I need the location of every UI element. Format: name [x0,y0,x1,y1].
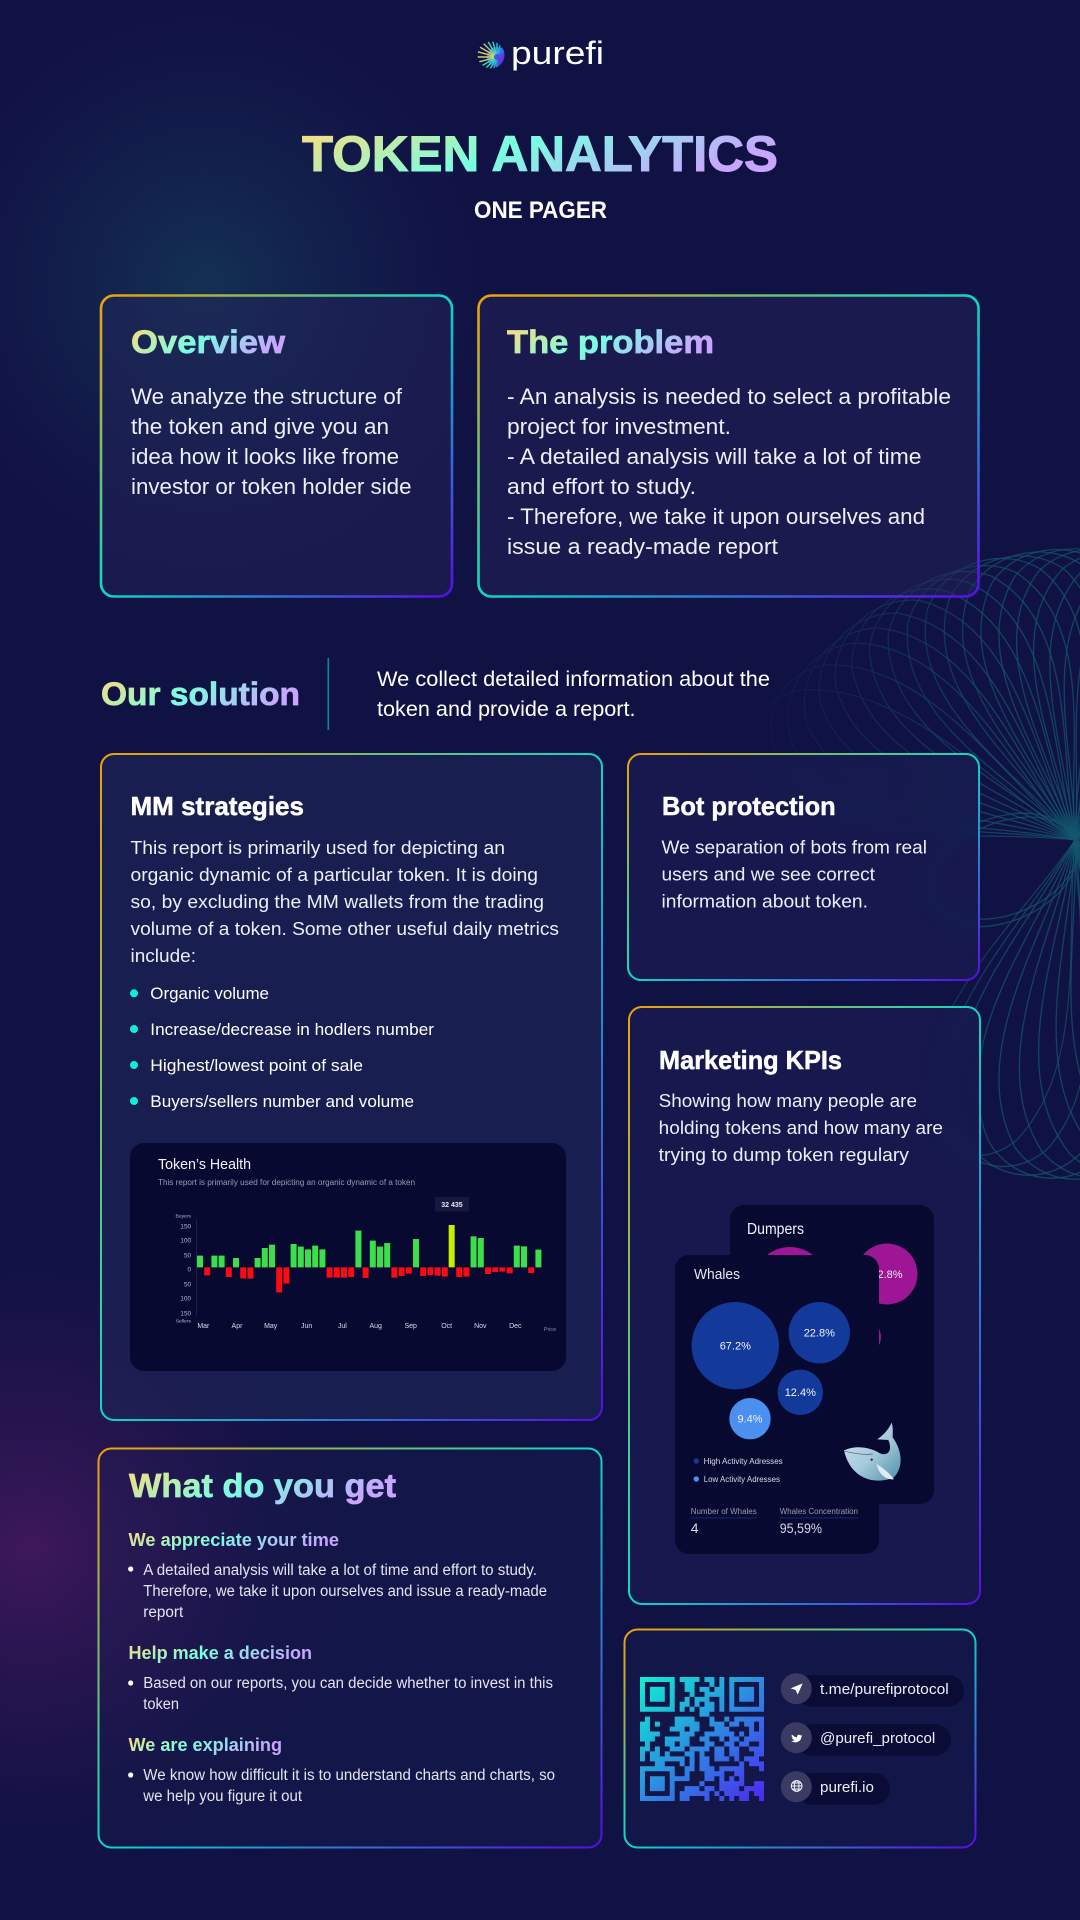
month labels: Jul [338,1323,347,1330]
section: we appreciate your time [128,1530,547,1621]
month labels: Nov [474,1323,487,1330]
subtitle: ONE PAGER [474,197,607,224]
overview body: the token and give you an [131,414,389,439]
icon: globe [791,1781,802,1791]
legend [694,1457,783,1484]
what do you get heading: What do you get [129,1467,396,1504]
problem body: - Therefore, we take it upon ourselves and [507,504,925,529]
month labels: Dec [509,1323,522,1330]
icon: twitter [791,1735,802,1742]
stat: number of whales [691,1507,757,1536]
legend: High Activity Adresses [704,1457,783,1466]
section: we are explaining: we help you figure it out [142,1788,303,1805]
y axis labels: 0 [187,1267,191,1274]
card: whales [675,1255,901,1554]
panel: marketing KPIs [628,1006,981,1605]
month labels [197,1323,556,1333]
problem body: issue a ready-made report [507,534,778,559]
panel: what do you get [98,1448,602,1848]
highlighted bar [449,1225,455,1267]
stat: whales concentration: Whales Concentration [780,1507,858,1516]
bubble 9.4% [729,1398,771,1439]
section: help make a decision: Based on our reports, you can decide whether to invest in this [143,1675,553,1692]
month labels: Mar [197,1323,210,1330]
sellers bars [204,1267,534,1292]
link: twitter: @purefi_protocol [820,1730,935,1747]
stat: number of whales: Number of Whales [691,1507,757,1516]
problem body [507,384,951,559]
MM bullet list: Buyers/sellers number and volume [150,1093,414,1111]
y axis labels: 100 [180,1296,191,1303]
y axis labels: 50 [184,1252,191,1259]
link: telegram [781,1673,964,1707]
bar chart [175,1214,556,1333]
overview heading: Overview [131,324,285,360]
month labels: Price [544,1327,556,1333]
stat: whales concentration: 95,59% [780,1520,822,1536]
bubble 22.8%: 22.8% [804,1328,835,1340]
MM body: include: [130,945,196,966]
heading: our solution: Our solution [101,676,300,712]
section: help make a decision [128,1643,553,1713]
bot heading: Bot protection [662,791,836,821]
icon: purefi fan [478,42,504,68]
section: we appreciate your time: We appreciate your time [128,1530,339,1550]
bubble 67.2% [692,1302,779,1389]
marketing body: trying to dump token regulary [659,1144,910,1165]
MM body: so, by excluding the MM wallets from the trading [130,891,544,912]
section: we appreciate your time: A detailed analysis will take a lot of time and effort to study. [143,1562,537,1579]
chart subtitle: This report is primarily used for depicting an organic dynamic of a token [158,1178,415,1187]
link: twitter [781,1722,951,1756]
y axis labels: 100 [180,1238,191,1245]
MM heading: MM strategies [130,791,304,821]
section: we are explaining: We know how difficult it is to understand charts and charts, so [143,1767,555,1784]
purple background glow [0,1210,370,1890]
panel: the problem [478,296,978,596]
QR code [640,1677,764,1801]
icon: whale [844,1423,901,1481]
panel: bot protection [627,753,980,981]
legend: Low Activity Adresses [704,1475,780,1484]
section: we appreciate your time: report [143,1604,184,1621]
solution description: token and provide a report. [377,698,636,721]
month labels: Sep [404,1323,417,1330]
MM bullet list: Highest/lowest point of sale [150,1057,363,1075]
month labels: Oct [441,1323,452,1330]
panel: overview [101,296,452,596]
link: website: purefi.io [820,1779,874,1796]
stat: whales concentration [780,1507,858,1536]
dumpers title: Dumpers [747,1221,804,1238]
marketing body: Showing how many people are [659,1090,917,1111]
section: help make a decision: Help make a decision [128,1643,312,1663]
MM body [130,837,559,966]
bubble 22.8% [789,1302,850,1363]
teal background glow [0,0,525,605]
marketing body [659,1090,943,1165]
problem body: - An analysis is needed to select a profitable [507,384,951,409]
bubble 12.4%: 12.4% [785,1387,816,1399]
MM bullet list: Increase/decrease in hodlers number [150,1021,435,1039]
MM body: volume of a token. Some other useful daily metrics [130,918,559,939]
problem heading: The problem [507,324,714,360]
bot body: information about token. [662,891,868,912]
tooltip: 32 435 [441,1202,463,1209]
icon: telegram [791,1683,803,1695]
title: TOKEN ANALYTICS [302,126,778,182]
chart title: Token’s Health [158,1157,251,1173]
y axis labels: 150 [180,1223,191,1230]
bubble 67.2%: 67.2% [720,1340,751,1352]
month labels: Aug [369,1323,382,1330]
overview body [131,384,412,499]
marketing heading: Marketing KPIs [659,1045,842,1075]
dumpers value: 22.8% [871,1269,903,1281]
panel: MM strategies [101,754,602,1420]
problem body: project for investment. [507,414,731,439]
MM body: This report is primarily used for depicting an [130,837,505,858]
bubble 12.4% [778,1370,823,1415]
link: telegram: t.me/purefiprotocol [820,1681,949,1698]
section: we appreciate your time: Therefore, we take it upon ourselves and issue a ready-made [143,1583,547,1600]
section: we are explaining [128,1735,555,1805]
overview body: investor or token holder side [131,474,412,499]
month labels: Jun [301,1323,312,1330]
link: website [781,1771,890,1805]
bot body: users and we see correct [662,864,875,885]
MM bullet list [130,985,435,1111]
buyers bars [197,1231,541,1267]
y axis labels [175,1214,192,1324]
y axis labels: Buyers [175,1214,192,1220]
solution description [377,668,770,721]
problem body: - A detailed analysis will take a lot of time [507,444,922,469]
MM bullet list: Organic volume [150,985,269,1003]
MM body: organic dynamic of a particular token. It is doing [130,864,538,885]
overview body: We analyze the structure of [131,384,403,409]
dumpers bubbles [753,1244,918,1355]
y axis labels: Sellers [176,1318,191,1324]
overview body: idea how it looks like frome [131,444,399,469]
y axis labels: 50 [184,1281,191,1288]
problem body: and effort to study. [507,474,696,499]
spirograph background pattern [791,548,1080,1180]
stat: number of whales: 4 [691,1520,699,1536]
logo: purefi [478,40,602,70]
marketing body: holding tokens and how many are [659,1117,943,1138]
bubble 9.4%: 9.4% [737,1414,763,1426]
section: help make a decision: token [143,1696,179,1713]
month labels: May [264,1323,278,1330]
divider [328,658,329,730]
bot body: We separation of bots from real [662,837,927,858]
bot body [662,837,927,912]
whales title: Whales [694,1267,740,1283]
card: dumpers [730,1205,934,1504]
logo wordmark: purefi [511,35,604,71]
y axis labels: 150 [180,1310,191,1317]
solution description: We collect detailed information about the [377,668,770,691]
tooltip [435,1197,469,1212]
panel: links and QR code [624,1630,976,1848]
month labels: Apr [232,1323,243,1330]
chart card: token's health [130,1143,566,1371]
section: we are explaining: We are explaining [128,1735,282,1755]
